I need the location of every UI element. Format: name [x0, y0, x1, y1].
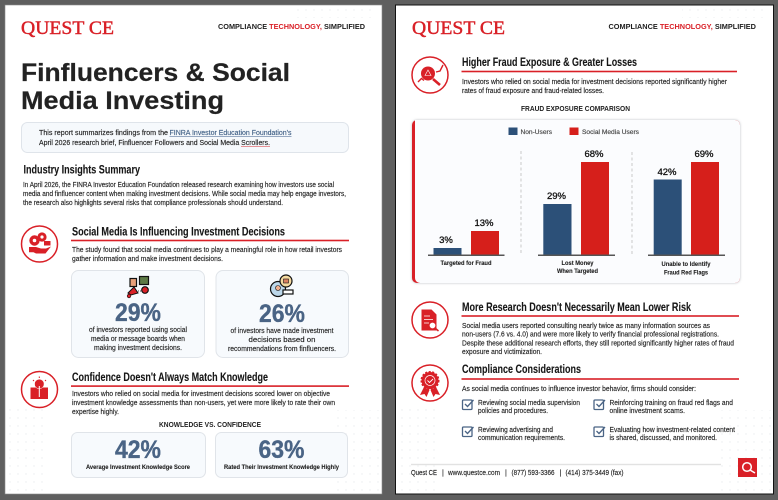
- icon: compliance rosette: [412, 365, 448, 401]
- logo: QUEST CE: [412, 19, 505, 39]
- title: Media Investing: [21, 87, 224, 115]
- bars: unable to identify fraud red flags: 69%: [694, 149, 714, 160]
- bars: lost money when targeted: [538, 149, 615, 275]
- social media paragraph: [72, 247, 342, 263]
- checklist item 4: Evaluating how investment-related content: [610, 427, 735, 434]
- stat card: 63%: Rated Their Investment Knowledge Highly: [224, 464, 340, 471]
- callout: report intro: This report summarizes findings from the: [39, 130, 168, 137]
- research paragraph: Social media users reported consulting nearly twice as many information sources as: [462, 323, 710, 330]
- icon: book and lightbulb: [22, 372, 58, 408]
- bars: lost money when targeted: When Targeted: [557, 268, 598, 275]
- bars: lost money when targeted: 68%: [584, 149, 604, 160]
- title: Finfluencers & Social: [21, 59, 290, 87]
- checklist item 2: Reinforcing training on fraud red flags and: [610, 400, 733, 407]
- heading: industry insights: Industry Insights Summary: [24, 164, 140, 176]
- summary paragraph: [23, 182, 346, 207]
- footer contact: [411, 470, 624, 477]
- checklist item 1: [462, 400, 580, 415]
- stat card: 29%: of investors reported using social: [89, 327, 187, 334]
- footer contact: (877) 593-3366: [512, 470, 555, 477]
- stat card: 26%: decisions based on: [248, 337, 316, 344]
- research paragraph: [462, 323, 734, 356]
- icon: finfluencer thumbs up: [270, 275, 293, 296]
- stat card: 29%: 29%: [115, 299, 161, 327]
- icon: document with magnifier: [412, 302, 448, 338]
- social media paragraph: The study found that social media continues to play a meaningful role in how retail investors: [72, 247, 342, 254]
- stat card: 29%: making investment decisions.: [94, 345, 182, 352]
- footer contact: (414) 375-3449 (fax): [566, 470, 624, 477]
- heading: compliance considerations: Compliance Considerations: [462, 364, 581, 376]
- page 1: [5, 5, 382, 494]
- confidence paragraph: Investors who relied on social media for investment decisions scored lower on objective: [72, 391, 330, 398]
- stat card: 26%: [216, 270, 348, 358]
- bars: targeted for fraud: [428, 218, 504, 267]
- callout: report intro: April 2026 research brief, Finfluencer Followers and Social Media Scrollers.: [39, 140, 270, 147]
- research paragraph: exposure and victimization.: [462, 349, 542, 356]
- confidence paragraph: [72, 391, 335, 416]
- research paragraph: non-users (7.6 vs. 4.0) and were more likely to verify financial professional registrations.: [462, 332, 719, 339]
- bars: lost money when targeted: Lost Money: [562, 260, 594, 267]
- stat card: 29%: [72, 270, 204, 358]
- stat card: 26%: 26%: [259, 300, 305, 328]
- summary paragraph: In April 2026, the FINRA Investor Education Foundation released research examining how investors use social: [23, 182, 334, 189]
- social media paragraph: gather information and make investment decisions.: [72, 256, 223, 263]
- bars: unable to identify fraud red flags: Unable to Identify: [662, 261, 711, 268]
- checklist item 3: communication requirements.: [478, 435, 565, 442]
- bars: targeted for fraud: Targeted for Fraud: [440, 260, 492, 267]
- checklist item 3: [462, 427, 565, 442]
- fraud paragraph: Investors who relied on social media for investment decisions reported significantly higher: [462, 79, 728, 86]
- footer contact: |: [560, 470, 562, 477]
- title: [21, 59, 290, 115]
- stat card: 26%: of investors have made investment: [230, 328, 334, 335]
- footer contact: |: [442, 470, 444, 477]
- stat card: 29%: media or message boards when: [91, 336, 185, 343]
- bars: lost money when targeted: 29%: [547, 191, 567, 202]
- confidence paragraph: investment knowledge assessments than non-users, yet were more likely to rate their own: [72, 400, 335, 407]
- checklist item 3: Reviewing advertising and: [478, 427, 553, 434]
- stat card: 63%: 63%: [258, 436, 304, 464]
- research paragraph: Despite these additional research efforts, they still reported significantly higher rates of fraud: [462, 340, 734, 347]
- callout: report intro: [22, 122, 348, 152]
- stat card: 42%: Average Investment Knowledge Score: [86, 464, 191, 471]
- fraud paragraph: [462, 79, 728, 95]
- bars: unable to identify fraud red flags: 42%: [657, 167, 677, 178]
- bars: targeted for fraud: 13%: [474, 218, 494, 229]
- heading: social media: Social Media Is Influencing Investment Decisions: [72, 226, 285, 238]
- bars: targeted for fraud: 3%: [439, 235, 453, 246]
- checklist item 1: Reviewing social media supervision: [478, 400, 580, 407]
- tagline: COMPLIANCE TECHNOLOGY, SIMPLIFIED: [218, 22, 365, 31]
- bars: unable to identify fraud red flags: Fraud Red Flags: [664, 270, 708, 276]
- stat card: 63%: [216, 432, 348, 478]
- summary paragraph: the research also highlights several risks that compliance professionals should understand.: [23, 200, 283, 207]
- icon: social media megaphone: [127, 276, 148, 298]
- heading: fraud exposure: Higher Fraud Exposure & Greater Losses: [462, 57, 637, 69]
- tagline: COMPLIANCE TECHNOLOGY, SIMPLIFIED: [608, 22, 756, 31]
- icon: fraud magnifier and trend: [412, 57, 448, 93]
- stat card: 42%: 42%: [115, 436, 161, 464]
- legend: Non-Users: [520, 129, 553, 136]
- summary paragraph: media and finfluencer content when making investment decisions. While social media may help engage investors,: [23, 191, 346, 198]
- logo: QUEST CE: [21, 19, 114, 39]
- legend: Social Media Users: [582, 129, 640, 136]
- bars: unable to identify fraud red flags: [648, 149, 725, 276]
- legend: [508, 128, 640, 136]
- chart title: FRAUD EXPOSURE COMPARISON: [521, 106, 630, 113]
- page 2: [396, 5, 774, 494]
- subheading: knowledge vs confidence: KNOWLEDGE VS. CONFIDENCE: [159, 422, 261, 429]
- stat card: 26%: recommendations from finfluencers.: [228, 346, 336, 353]
- checklist item 4: [594, 427, 735, 442]
- heading: confidence: Confidence Doesn't Always Match Knowledge: [72, 372, 268, 384]
- confidence paragraph: expertise highly.: [72, 409, 119, 416]
- callout: report intro: FINRA Investor Education Foundation's: [170, 130, 292, 137]
- checklist item 4: is shared, discussed, and monitored.: [610, 435, 717, 442]
- panel: fraud exposure bar chart: [412, 120, 740, 283]
- footer contact: Quest CE: [411, 470, 437, 477]
- heading: more research: More Research Doesn't Necessarily Mean Lower Risk: [462, 302, 691, 314]
- icon: gears over hand: [22, 226, 58, 262]
- icon: quest logo square: [738, 458, 757, 477]
- checklist item 1: policies and procedures.: [478, 408, 548, 415]
- stat card: 42%: [72, 432, 206, 478]
- checklist item 2: [594, 400, 733, 415]
- fraud paragraph: rates of fraud exposure and fraud-related losses.: [462, 88, 604, 95]
- compliance intro: As social media continues to influence investor behavior, firms should consider:: [462, 386, 696, 393]
- checklist item 2: online investment scams.: [610, 408, 685, 415]
- footer contact: www.questce.com: [447, 470, 500, 477]
- footer contact: |: [505, 470, 507, 477]
